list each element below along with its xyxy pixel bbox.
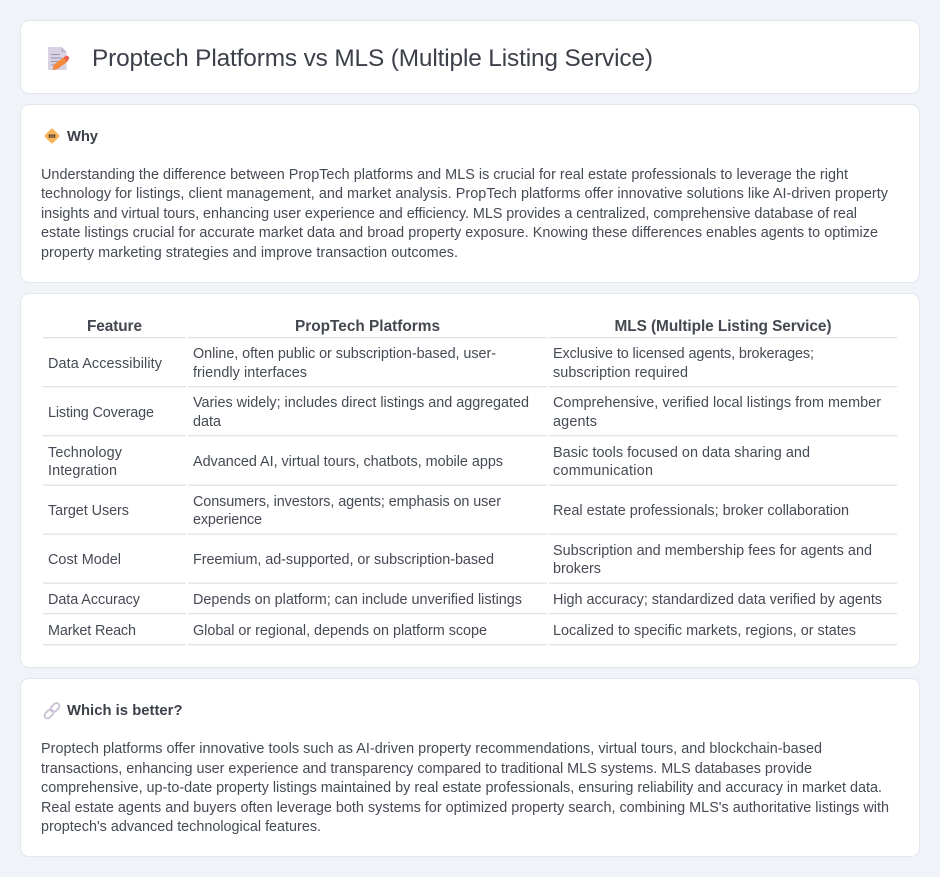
- table header: MLS (Multiple Listing Service): [614, 318, 832, 335]
- row: listing coverage: [43, 395, 897, 436]
- text block: which is better: transactions, enhancing user experience and transparency compared to traditional MLS systems. MLS databases provide: [41, 761, 812, 777]
- row: market reach: Global or regional, depends on platform scope: [193, 623, 487, 639]
- panel: which is better: [20, 678, 920, 856]
- row: cost model: [43, 543, 897, 584]
- text block: which is better: comprehensive, up-to-date property listings maintained by real estate professionals, ensuring reliability and accuracy in market data.: [41, 780, 882, 796]
- row: market reach: Market Reach: [48, 623, 136, 639]
- title: Proptech Platforms vs MLS (Multiple Listing Service): [92, 45, 653, 72]
- row: cost model: Subscription and membership fees for agents and: [553, 543, 872, 559]
- row: cost model: Freemium, ad-supported, or subscription-based: [193, 552, 494, 568]
- row: technology integration: Advanced AI, virtual tours, chatbots, mobile apps: [193, 454, 503, 470]
- row: listing coverage: agents: [553, 414, 597, 430]
- row: listing coverage: Varies widely; includes direct listings and aggregated: [193, 395, 529, 411]
- heading: which is better: Which is better?: [67, 703, 182, 719]
- row: target users: Real estate professionals; broker collaboration: [553, 503, 849, 519]
- text block: which is better: Proptech platforms offer innovative tools such as AI-driven property recommendations, virtual tours, and blockchain-based: [41, 741, 822, 757]
- row: target users: Target Users: [48, 503, 129, 519]
- row: technology integration: Integration: [48, 463, 117, 479]
- row: data accessibility: subscription required: [553, 365, 688, 381]
- icon: document with pencil: [48, 47, 69, 70]
- row: listing coverage: Comprehensive, verified local listings from member: [553, 395, 881, 411]
- text block: why: technology for listings, client management, and market analysis. PropTech platforms offer innovative solutions like AI-driven property: [41, 186, 889, 202]
- text block: which is better: Real estate agents and buyers often leverage both systems for optimized property search, combining MLS's authoritative listings with: [41, 800, 889, 816]
- text block: why: insights and virtual tours, enhancing user experience and efficiency. MLS provides a centralized, comprehensive database of real: [41, 206, 857, 222]
- row: data accessibility: [43, 346, 897, 387]
- row: data accuracy: Depends on platform; can include unverified listings: [193, 592, 522, 608]
- row: market reach: Localized to specific markets, regions, or states: [553, 623, 856, 639]
- row: technology integration: communication: [553, 463, 653, 479]
- row: listing coverage: Listing Coverage: [48, 405, 154, 421]
- panel: why: [20, 104, 920, 282]
- panel: title header: [20, 20, 920, 94]
- icon: warning diamond: [44, 128, 60, 144]
- row: target users: experience: [193, 512, 262, 528]
- panel: comparison table: [20, 294, 920, 668]
- row: target users: Consumers, investors, agents; emphasis on user: [193, 494, 501, 510]
- row: data accessibility: Data Accessibility: [48, 356, 163, 372]
- row: cost model: Cost Model: [48, 552, 121, 568]
- row: listing coverage: data: [193, 414, 221, 430]
- text block: why: [41, 167, 889, 261]
- table header: PropTech Platforms: [295, 318, 440, 335]
- text block: which is better: proptech's advanced technological features.: [41, 819, 321, 835]
- row: data accessibility: friendly interfaces: [193, 365, 307, 381]
- row: data accuracy: High accuracy; standardized data verified by agents: [553, 592, 882, 608]
- row: data accessibility: Online, often public or subscription-based, user-: [193, 346, 496, 362]
- row: data accuracy: [43, 592, 897, 614]
- row: target users: [43, 494, 897, 535]
- text block: why: estate listings crucial for accurate market data and broad property exposure. Knowing these differences enables agents to optimize: [41, 225, 878, 241]
- row: data accuracy: Data Accuracy: [48, 592, 141, 608]
- row: technology integration: Basic tools focused on data sharing and: [553, 445, 810, 461]
- heading: why: Why: [67, 129, 99, 145]
- text block: why: property marketing strategies and improve transaction outcomes.: [41, 245, 458, 261]
- row: technology integration: [43, 445, 897, 486]
- icon: chain link: [43, 702, 61, 720]
- text block: which is better: [41, 741, 889, 835]
- row: cost model: brokers: [553, 561, 601, 577]
- table header: [43, 318, 897, 338]
- text block: why: Understanding the difference between PropTech platforms and MLS is crucial for real estate professionals to leverage the right: [41, 167, 848, 183]
- row: data accessibility: Exclusive to licensed agents, brokerages;: [553, 346, 814, 362]
- row: market reach: [43, 623, 897, 645]
- row: technology integration: Technology: [48, 445, 123, 461]
- table header: Feature: [87, 318, 142, 335]
